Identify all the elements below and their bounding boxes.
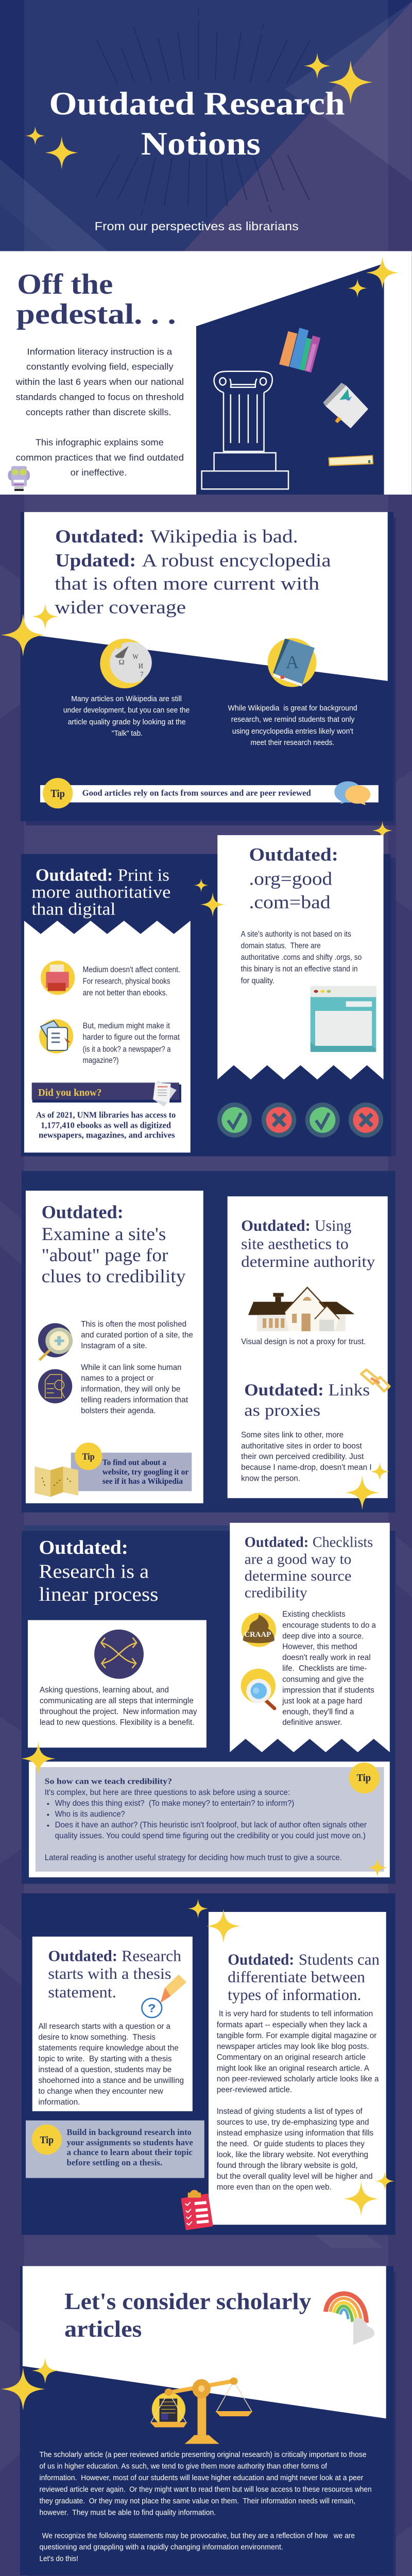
icon: printer [41, 961, 75, 995]
text block [45, 1777, 367, 1862]
heading: Outdated: [245, 1534, 308, 1550]
icon: craap: CRAAP [244, 1630, 271, 1638]
callout: background research tip: Tip [40, 2134, 54, 2146]
subtitle: From our perspectives as librarians [95, 220, 299, 233]
heading: statement. [48, 1984, 116, 2001]
text: peer-reviewed article. [217, 2085, 292, 2094]
heading: "about" page for [42, 1245, 168, 1265]
text: life. Checklists are time- [282, 1664, 367, 1673]
text: about page: and curated portion of a site, the [81, 1330, 193, 1340]
heading: links as proxies: Links [328, 1380, 370, 1399]
icon: crossing arrows [94, 1630, 144, 1679]
text: ebook stat: newspapers, magazines, and archives [39, 1130, 175, 1140]
intro text: within the last 6 years when our national [15, 377, 184, 387]
heading: Print is [117, 866, 169, 885]
icon: wikipedia globe: 7 [140, 670, 143, 678]
icon: document search [38, 1369, 72, 1403]
heading: Examine a site's [42, 1224, 166, 1244]
icon: robot [8, 466, 30, 491]
icon: wikipedia globe [100, 639, 152, 688]
text: topic to write. By starting with a thesis [38, 2054, 172, 2063]
text block: Why does this thing exist? (To make money? to entertain? to inform?) [55, 1799, 294, 1808]
intro text: Information literacy instruction is a [27, 346, 173, 357]
panel: print and domains [21, 835, 396, 1156]
panel: checklists [230, 1523, 390, 1752]
text: wikipedia notes: under development, but you can see the [63, 705, 190, 714]
intro text: standards changed to focus on threshold [16, 392, 184, 402]
heading: .org=good [249, 869, 332, 889]
heading: Outdated: [42, 1202, 124, 1222]
icon: wikipedia globe: W [133, 653, 139, 660]
text: scholarly article intro: questioning and grappling with a rapidly changing information environment. [39, 2543, 283, 2551]
callout: tip: see if it has a Wikipedia [102, 1477, 183, 1486]
heading: determine authority [241, 1253, 375, 1270]
heading [16, 268, 176, 330]
header banner [0, 0, 412, 251]
text: to change when they encounter new [38, 2087, 164, 2096]
text: desire to know something. Thesis [38, 2032, 156, 2042]
text: definitive answer. [282, 1718, 342, 1727]
text: for quality. [241, 976, 274, 986]
text: Existing checklists [282, 1609, 346, 1619]
icon: clipboard [182, 2190, 212, 2229]
heading: Using [315, 1217, 351, 1234]
panel: thesis and information types [22, 1893, 396, 2235]
heading: that is often more current with [55, 573, 319, 594]
heading: differentiate between [228, 1969, 365, 1986]
text: lead to new questions. Flexibility is a benefit. [40, 1718, 194, 1727]
text: Asking questions, learning about, and [40, 1685, 169, 1694]
heading [249, 844, 338, 912]
icon: browser window [311, 986, 376, 1052]
callout: tip: Tip [82, 1451, 95, 1462]
callout: tip: website, try googling it or [102, 1468, 189, 1477]
heading: clues to credibility [42, 1266, 186, 1286]
heading: wider coverage [55, 597, 186, 617]
heading: more authoritative [31, 883, 170, 902]
icon: chain links [361, 1370, 389, 1392]
heading: Wikipedia is bad. [150, 526, 298, 547]
heading: linear process [39, 1537, 159, 1605]
heading: Outdated: [249, 844, 338, 865]
panel: site credibility [22, 1171, 396, 1513]
text: medium: magazine?) [83, 1056, 119, 1065]
text: statements require knowledge about the [38, 2043, 179, 2053]
heading [42, 1202, 186, 1286]
icon: newspaper [153, 1081, 177, 1107]
heading: Students can [299, 1952, 380, 1969]
stars [25, 53, 373, 170]
text [217, 2009, 379, 2192]
heading [48, 1947, 181, 2001]
callout: did you know [32, 1081, 181, 1107]
icon: speech bubbles [334, 781, 370, 805]
tip badge [349, 1762, 380, 1793]
intro text: or ineffective. [71, 467, 127, 478]
text: deep dive into a source. [282, 1632, 364, 1640]
illustration panel: pedestal [196, 263, 384, 495]
text block: So how can we teach credibility? [45, 1777, 172, 1786]
stars [348, 256, 399, 298]
heading: site aesthetics to [241, 1235, 349, 1253]
icon: pencil and question: ? [148, 2002, 156, 2015]
text: information. [38, 2097, 80, 2107]
panel: off the pedestal [0, 251, 412, 495]
icon: books [279, 328, 320, 372]
panel: print vs digital [24, 866, 191, 1153]
callout: background research tip: before settling on a thesis. [67, 2158, 162, 2167]
icon: pencil and question [142, 1974, 186, 2018]
panel: org vs com [217, 835, 384, 1079]
text: about page: telling readers information that [81, 1395, 188, 1404]
text: about page: information, they will only be [81, 1384, 180, 1394]
icon: magnifying eye [241, 1669, 276, 1708]
text: wikipedia notes: "Talk" tab. [112, 728, 143, 737]
stars [1, 603, 58, 657]
text: medium: But, medium might make it [83, 1021, 170, 1030]
heading [55, 526, 331, 617]
text: wikipedia notes: article quality grade by looking at the [68, 717, 186, 726]
text: consuming and give the [282, 1674, 364, 1684]
icon: wikipedia globe: Ω [119, 658, 125, 666]
heading: Outdated: [241, 1217, 311, 1234]
icon: encyclopedia [268, 638, 317, 687]
text: throughout the project. New information may [40, 1707, 197, 1716]
heading [241, 1217, 375, 1270]
title [49, 85, 345, 162]
text: wikipedia notes [63, 694, 357, 747]
heading: linear process: Research is a [39, 1561, 149, 1582]
intro text: This infographic explains some [36, 437, 164, 447]
text: medium: harder to figure out the format [83, 1032, 180, 1042]
tip badge: Tip [357, 1772, 371, 1784]
sunburst rays [96, 7, 310, 218]
text: about page: This is often the most polished [81, 1319, 186, 1329]
callout: did you know: Did you know? [38, 1087, 101, 1098]
stars [188, 1899, 394, 2216]
icon: encyclopedia: A [286, 652, 299, 672]
text: communicating are all steps that intermingle [40, 1696, 194, 1705]
intro text: concepts rather than discrete skills. [26, 407, 171, 417]
heading: links as proxies: as proxies [244, 1401, 320, 1419]
stars [194, 878, 225, 917]
callout: tip: Tip [50, 787, 65, 800]
heading: Outdated: [36, 866, 113, 885]
heading: linear process: linear process [39, 1584, 159, 1605]
icon: magnifier [38, 1323, 73, 1360]
icon: ionic column [202, 371, 288, 489]
heading: A robust encyclopedia [142, 550, 331, 570]
heading [31, 866, 170, 919]
text: more even than on the open web. [217, 2182, 332, 2192]
intro text [15, 346, 184, 478]
callout: tip: Good articles rely on facts from sources and are peer reviewed [82, 788, 311, 798]
icon: document [39, 1019, 73, 1054]
heading: Off the [17, 268, 113, 300]
text: medium: (is it a book? a newspaper? a [83, 1045, 171, 1054]
heading [245, 1534, 373, 1601]
icon: open book [323, 383, 368, 428]
icon: house [248, 1287, 354, 1331]
panel: nonlinear text [28, 1620, 207, 1748]
text: scholarly article intro: Let's do this! [39, 2554, 78, 2563]
icon: rainbow [325, 2294, 374, 2345]
heading: than digital [31, 900, 115, 919]
text: about page: While it can link some human [81, 1363, 181, 1372]
text: scholarly article intro: however. They must be able to find quality information. [39, 2508, 216, 2517]
intro text: common practices that we find outdated [16, 452, 184, 463]
callout: tip [71, 1443, 192, 1491]
panel: information types [209, 1912, 386, 2225]
text: about page [81, 1319, 193, 1415]
heading: Outdated: [48, 1947, 117, 1965]
text: ebook stat: 1,177,410 ebooks as well as digitized [41, 1120, 171, 1130]
panel: research process and checklists [21, 1523, 396, 1884]
stars [1, 2358, 392, 2576]
text: shoehorned into a stance and be unwilling [38, 2076, 184, 2085]
text: wikipedia notes: meet their research needs. [251, 738, 334, 747]
heading: articles [64, 2316, 142, 2342]
heading: determine source [245, 1568, 351, 1584]
panel: thesis statement [32, 1937, 193, 2111]
text [241, 929, 362, 986]
text: links: Some sites link to other, more [241, 1430, 344, 1439]
title: Notions [141, 125, 261, 162]
text: links: know the person. [241, 1473, 300, 1483]
heading: types of information. [228, 1987, 361, 2004]
text: about page: names to a project or [81, 1374, 154, 1383]
stars [21, 1741, 387, 1877]
panel: let's consider scholarly articles [1, 2266, 396, 2576]
text: just look at a page hard [282, 1697, 362, 1705]
heading: Outdated: [228, 1952, 294, 1969]
text [40, 1685, 197, 1727]
icon: closed book [329, 455, 373, 466]
heading: credibility [245, 1585, 307, 1601]
text: doesn't really work in real [282, 1653, 371, 1662]
panel: aesthetics and links [228, 1196, 389, 1510]
text: medium [83, 965, 180, 1065]
intro text: constantly evolving field, especially [26, 361, 174, 372]
text: ebook stat: As of 2021, UNM libraries has access to [36, 1110, 176, 1120]
text block: It's complex, but here are three questions to ask before using a source: [45, 1788, 290, 1797]
heading: .com=bad [249, 892, 331, 912]
text block: Who is its audience? [55, 1809, 125, 1819]
heading: starts with a thesis [48, 1965, 171, 1982]
text: All research starts with a question or a [38, 2022, 170, 2031]
star [372, 821, 392, 840]
stars [345, 1462, 389, 1510]
heading [64, 2289, 311, 2342]
heading: links as proxies: Outdated: [244, 1380, 324, 1399]
text: links [241, 1430, 372, 1483]
callout: background research tip: a chance to learn about their topic [67, 2148, 193, 2157]
panel: wikipedia [1, 512, 396, 840]
icon: wikipedia globe: И [139, 662, 143, 670]
callout: background research tip: Build in background research into [67, 2128, 192, 2137]
heading [228, 1952, 380, 2004]
text: domain status. There are [241, 941, 321, 950]
heading: Research [122, 1947, 181, 1965]
text: medium: For research, physical books [83, 976, 170, 986]
callout: tip [40, 778, 379, 808]
callout: background research tip: your assignments so students have [67, 2138, 193, 2147]
callout: background research tip [26, 2121, 204, 2178]
heading: Checklists [313, 1534, 373, 1550]
icons: check and cross badges [217, 1103, 383, 1138]
heading: Updated: [55, 550, 136, 570]
panel: about page [26, 1191, 203, 1503]
text: about page: bolsters their agenda. [81, 1406, 156, 1415]
heading: links as proxies [244, 1380, 370, 1419]
icon: craap [242, 1613, 276, 1647]
text: medium: Medium doesn't affect content. [83, 965, 180, 974]
text: medium: are not better than ebooks. [83, 988, 167, 997]
icon: balance scale [150, 2378, 253, 2444]
heading: Outdated: [55, 526, 144, 547]
text: instead of a question, students may be [38, 2065, 171, 2074]
text [282, 1609, 376, 1727]
text: However, this method [282, 1642, 357, 1651]
panel: teaching credibility tip [21, 1741, 390, 1877]
icon: map [35, 1466, 78, 1497]
text [38, 2022, 184, 2107]
text: scholarly article intro [39, 2450, 372, 2563]
heading: Let's consider scholarly [64, 2289, 311, 2314]
text: ebook stat [36, 1110, 176, 1140]
heading: linear process: Outdated: [39, 1537, 128, 1558]
text: about page: Instagram of a site. [81, 1341, 147, 1350]
heading: pedestal. . . [16, 298, 176, 330]
text: enough, they'll find a [282, 1707, 354, 1717]
text: wikipedia notes: Many articles on Wikipedia are still [71, 694, 182, 703]
callout: tip: To find out about a [102, 1459, 166, 1467]
heading: are a good way to [245, 1551, 351, 1567]
